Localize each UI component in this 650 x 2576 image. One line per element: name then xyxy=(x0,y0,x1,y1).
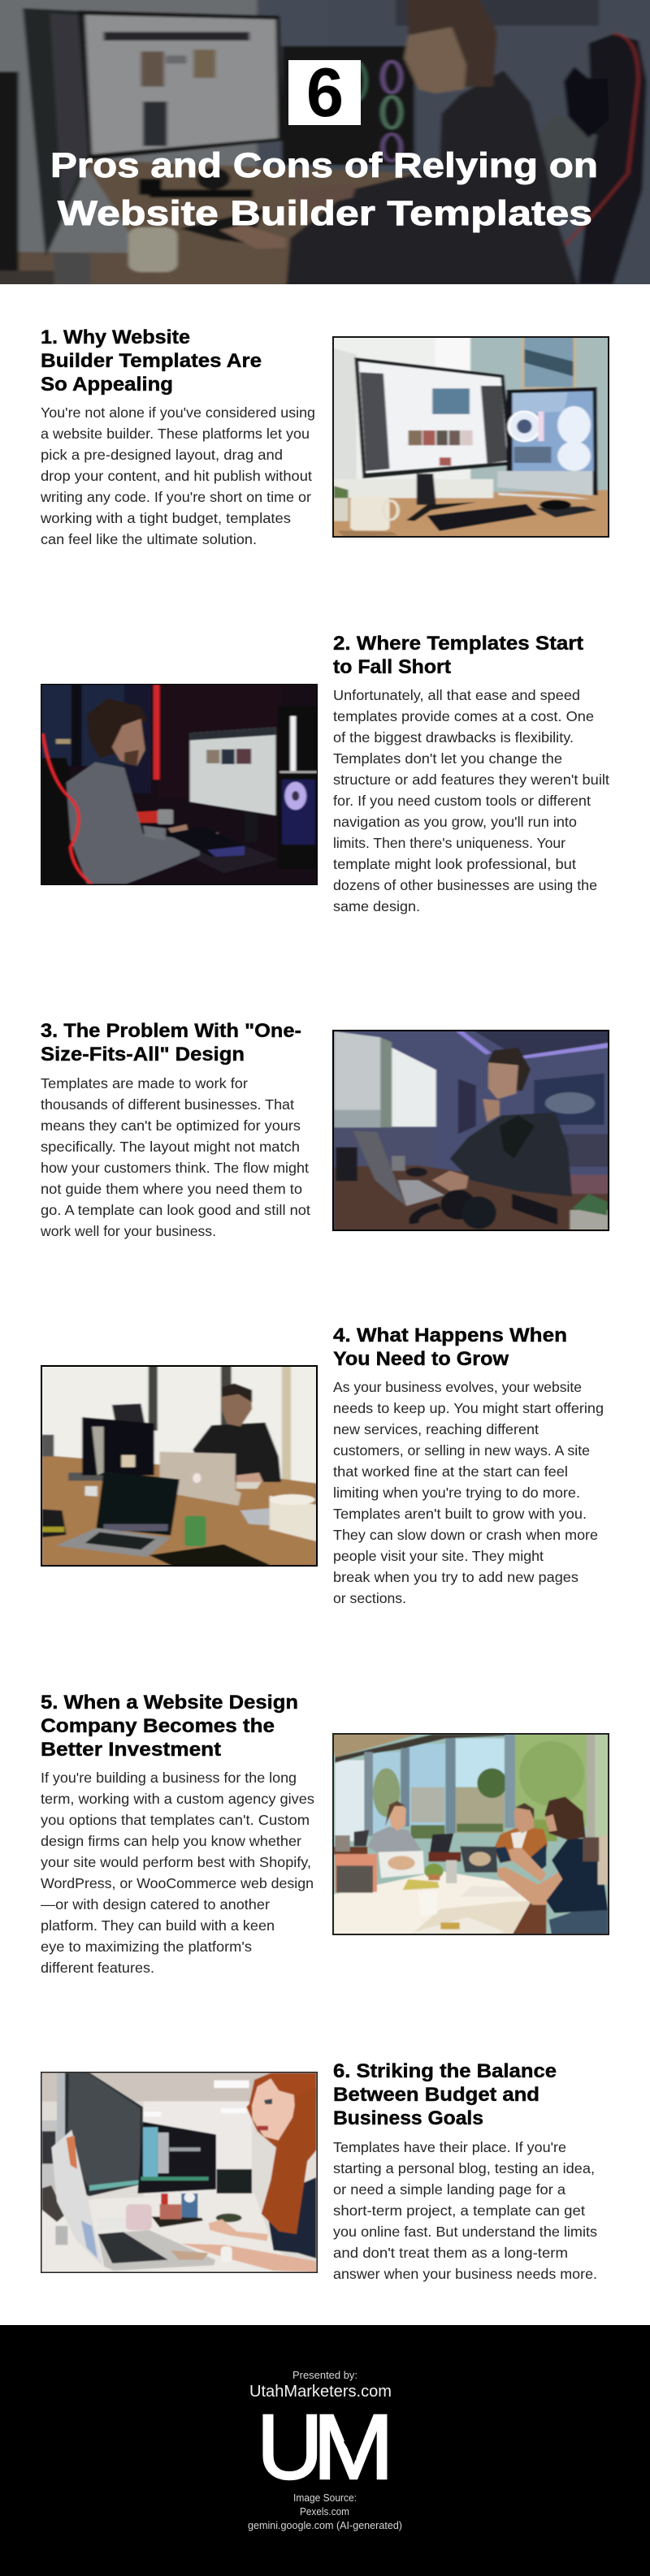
body text 5: different features. xyxy=(41,1960,154,1976)
presented by xyxy=(249,2369,392,2401)
heading 2 xyxy=(333,633,583,678)
footer xyxy=(0,2325,650,2576)
body text 4: new services, reaching different xyxy=(333,1421,539,1437)
heading 1 xyxy=(41,326,262,395)
heading 3: 3. The Problem With "One- xyxy=(41,1020,301,1042)
body text 4: limiting when you're trying to do more. xyxy=(333,1485,580,1501)
photo: red-haired developer at monitors xyxy=(38,2069,323,2277)
body text 6: you online fast. But understand the limits xyxy=(333,2224,597,2240)
title: Pros and Cons of Relying on xyxy=(50,146,598,185)
body text 3: means they can't be optimized for yours xyxy=(41,1117,301,1134)
body text 1: pick a pre-designed layout, drag and xyxy=(41,447,283,463)
image source credits xyxy=(248,2492,402,2531)
body text 2: Templates don't let you change the xyxy=(333,750,562,767)
heading 4 xyxy=(333,1325,567,1370)
body text 4: that worked fine at the start can feel xyxy=(333,1463,568,1480)
body text 4: As your business evolves, your website xyxy=(333,1379,582,1395)
heading 6: 6. Striking the Balance xyxy=(333,2060,557,2082)
body text 4: customers, or selling in new ways. A site xyxy=(333,1442,590,1459)
image source credits: Image Source: xyxy=(293,2492,357,2504)
heading 3 xyxy=(41,1020,301,1065)
body text 6: short-term project, a template can get xyxy=(333,2202,585,2219)
body text 5: WordPress, or WooCommerce web design xyxy=(41,1875,314,1891)
body text 2: templates provide comes at a cost. One xyxy=(333,708,594,724)
body text 3: Templates are made to work for xyxy=(41,1075,248,1091)
body text 1 xyxy=(40,404,315,547)
panel: section 5 xyxy=(41,1692,614,1976)
body text 3: how your customers think. The flow might xyxy=(41,1160,309,1176)
panel: section 3 xyxy=(40,1020,618,1239)
body text 2: same design. xyxy=(333,898,420,914)
photo: thoughtful man at laptop in purple-lit office xyxy=(327,1027,618,1236)
presented by: Presented by: xyxy=(292,2369,358,2381)
photo: team meeting at table by large windows xyxy=(330,1731,614,1938)
body text 1: a website builder. These platforms let you xyxy=(41,426,310,442)
body text 5: If you're building a business for the long xyxy=(41,1770,297,1786)
image source credits: Pexels.com xyxy=(300,2505,349,2518)
panel: section 1 xyxy=(40,326,618,547)
hero banner xyxy=(0,0,650,290)
panel: section 4 xyxy=(37,1325,604,1606)
body text 5 xyxy=(41,1770,314,1976)
body text 3: thousands of different businesses. That xyxy=(41,1096,294,1113)
body text 5: you options that templates can't. Custom xyxy=(41,1812,310,1828)
body text 3 xyxy=(40,1075,310,1239)
body text 2 xyxy=(333,687,609,914)
body text 1: drop your content, and hit publish without xyxy=(41,468,312,484)
body text 2: Unfortunately, all that ease and speed xyxy=(333,687,580,703)
body text 2: for. If you need custom tools or different xyxy=(333,793,591,809)
body text 3: work well for your business. xyxy=(40,1223,216,1239)
heading 5 xyxy=(41,1692,298,1761)
body text 1: writing any code. If you're short on time or xyxy=(40,489,311,505)
heading 1: 1. Why Website xyxy=(41,326,190,348)
body text 2: template might look professional, but xyxy=(333,856,576,872)
panel: section 2 xyxy=(37,633,609,914)
body text 3: not guide them where you need them to xyxy=(41,1181,302,1197)
body text 6: or need a simple landing page for a xyxy=(333,2181,566,2198)
body text 2: structure or add features they weren't built xyxy=(333,772,609,788)
heading 6: Business Goals xyxy=(333,2107,483,2129)
number box xyxy=(288,54,361,132)
body text 3: go. A template can look good and still not xyxy=(41,1202,310,1218)
body text 2: limits. Then there's uniqueness. Your xyxy=(333,835,566,851)
title: Website Builder Templates xyxy=(58,194,592,233)
heading 5: 5. When a Website Design xyxy=(41,1692,298,1714)
body text 5: design firms can help you know whether xyxy=(41,1833,301,1849)
body text 5: —or with design catered to another xyxy=(41,1896,270,1913)
number box: 6 xyxy=(306,54,344,132)
body text 5: your site would perform best with Shopify, xyxy=(41,1854,311,1870)
logo: UM with mountain: U xyxy=(257,2396,323,2498)
body text 4: needs to keep up. You might start offering xyxy=(333,1400,604,1416)
heading 6: Between Budget and xyxy=(333,2084,540,2106)
body text 2: navigation as you grow, you'll run into xyxy=(333,814,577,830)
body text 4: break when you try to add new pages xyxy=(333,1569,578,1585)
body text 2: dozens of other businesses are using the xyxy=(333,877,597,893)
body text 3: specifically. The layout might not match xyxy=(41,1139,300,1155)
heading 4: 4. What Happens When xyxy=(333,1325,567,1346)
heading 5: Better Investment xyxy=(41,1739,221,1761)
photo: man at dark desk with red lights xyxy=(37,682,323,888)
heading 5: Company Becomes the xyxy=(41,1715,275,1737)
body text 4: or sections. xyxy=(333,1590,406,1606)
heading 2: 2. Where Templates Start xyxy=(333,633,583,655)
panel: section 6 xyxy=(38,2060,597,2282)
body text 6: Templates have their place. If you're xyxy=(333,2139,566,2155)
hero photo: man at desktop monitor, darkened xyxy=(0,0,650,290)
presented by: UtahMarketers.com xyxy=(249,2383,392,2401)
heading 1: Builder Templates Are xyxy=(41,350,262,372)
body text 1: You're not alone if you've considered using xyxy=(41,404,315,421)
logo: UM with mountain: M xyxy=(313,2396,394,2498)
logo: UM with mountain xyxy=(257,2396,394,2498)
body text 6 xyxy=(333,2139,597,2282)
image source credits: gemini.google.com (AI-generated) xyxy=(248,2519,402,2531)
heading 3: Size-Fits-All" Design xyxy=(41,1044,245,1065)
body text 4: They can slow down or crash when more xyxy=(333,1527,598,1543)
body text 4 xyxy=(333,1379,604,1606)
body text 6: and don't treat them as a long-term xyxy=(333,2245,568,2261)
body text 5: eye to maximizing the platform's xyxy=(41,1938,252,1955)
body text 2: of the biggest drawbacks is flexibility. xyxy=(333,729,574,746)
heading 6 xyxy=(333,2060,557,2129)
heading 4: You Need to Grow xyxy=(333,1348,509,1370)
heading 1: So Appealing xyxy=(41,374,173,395)
photo: coworkers with laptops at wooden table xyxy=(37,1363,323,1569)
body text 6: starting a personal blog, testing an idea, xyxy=(333,2160,595,2176)
body text 4: Templates aren't built to grow with you. xyxy=(333,1506,587,1522)
title xyxy=(50,146,598,233)
photo: curved monitor and gaming PC on desk xyxy=(327,333,618,542)
heading 2: to Fall Short xyxy=(333,656,451,678)
body text 4: people visit your site. They might xyxy=(333,1548,544,1564)
body text 5: platform. They can build with a keen xyxy=(41,1917,275,1934)
body text 1: working with a tight budget, templates xyxy=(40,510,291,526)
body text 1: can feel like the ultimate solution. xyxy=(41,531,257,547)
body text 5: term, working with a custom agency gives xyxy=(41,1791,314,1807)
body text 6: answer when your business needs more. xyxy=(333,2266,597,2282)
